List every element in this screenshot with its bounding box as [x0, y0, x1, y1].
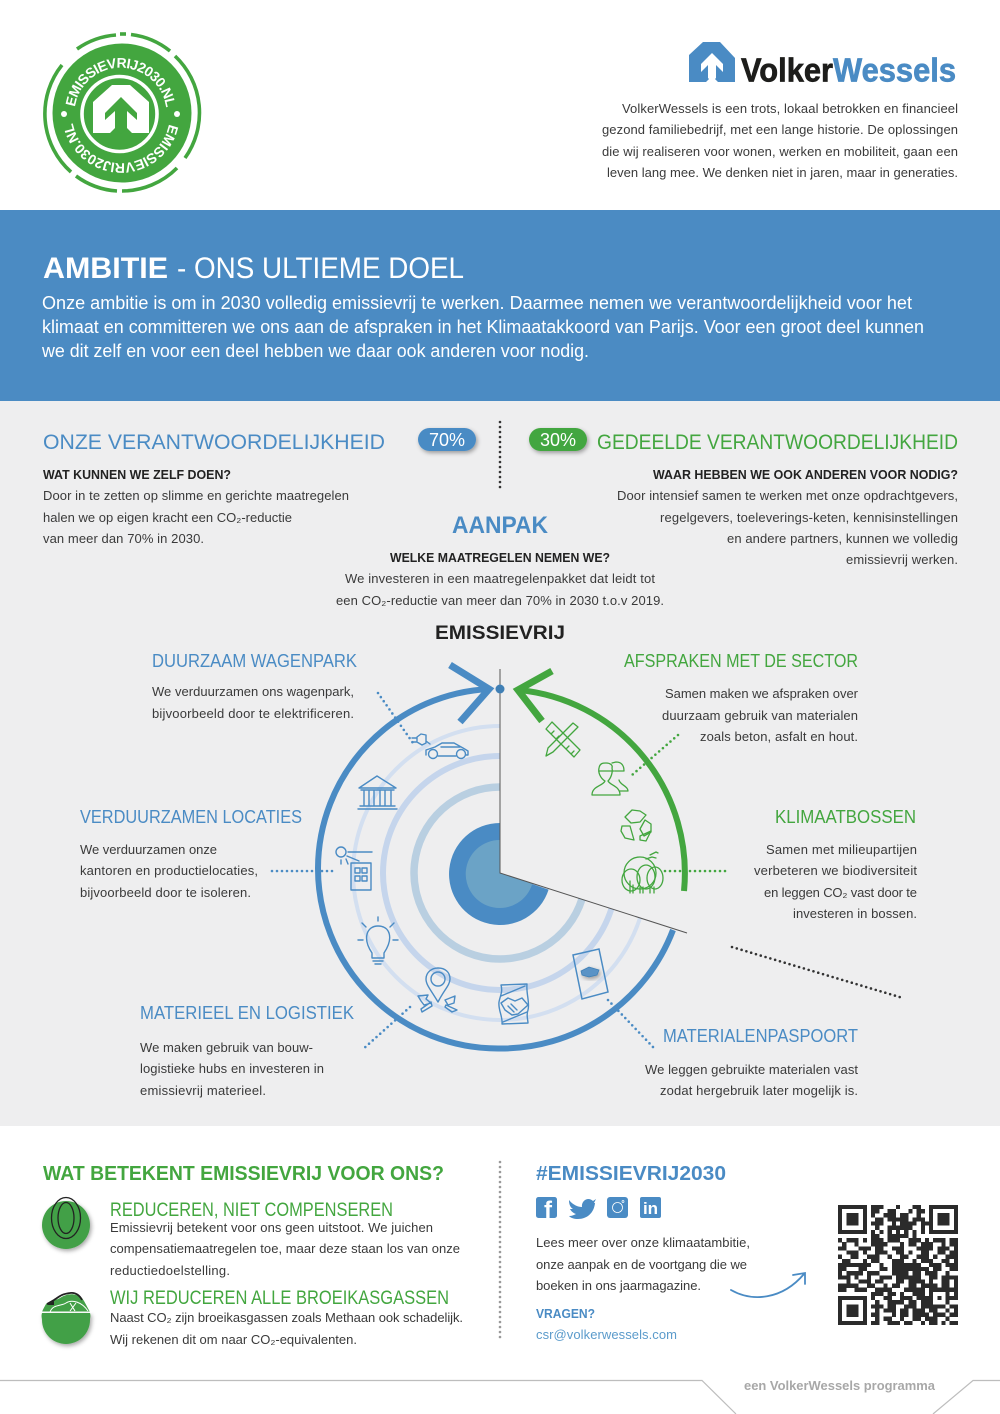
arc: green progress arrow [518, 671, 685, 891]
icon: instagram [607, 1197, 628, 1218]
text block: reduceren niet compenseren: compensatiemaatregelen toe, maar deze staan los van onze [110, 1241, 460, 1256]
text block: wat kunnen we zelf doen: Door in te zetten op slimme en gerichte maatregelen [43, 488, 349, 503]
heading: ambitie: AMBITIE [43, 252, 168, 285]
callout: materieel en logistiek: We maken gebruik van bouw- [140, 1040, 313, 1055]
ring: inner disc [449, 823, 549, 925]
text block: reduceren niet compenseren: REDUCEREN, NIET COMPENSEREN [110, 1200, 393, 1221]
text block: company intro: gezond familiebedrijf, met een lange historie. De oplossingen [602, 122, 958, 137]
chart: concentric reduction diagram [272, 665, 903, 1050]
text block: alle broeikasgassen: Naast CO₂ zijn broeikasgassen zoals Methaan ook schadelijk. [110, 1310, 463, 1325]
ring: inner core [466, 840, 532, 908]
long dotted divider [732, 947, 903, 998]
callout: duurzaam wagenpark: We verduurzamen ons wagenpark, [152, 684, 354, 699]
icon: recycling [621, 810, 651, 841]
ring: fourth [353, 726, 640, 1020]
text block: wat kunnen we zelf doen [43, 467, 349, 546]
badge: 70%: 70% [429, 430, 465, 450]
callout: afspraken met de sector: Samen maken we afspraken over [665, 686, 859, 701]
text block: reduceren niet compenseren [110, 1200, 460, 1278]
text block: alle broeikasgassen: WIJ REDUCEREN ALLE BROEIKASGASSEN [110, 1288, 449, 1309]
callout: afspraken met de sector: AFSPRAKEN MET DE SECTOR [624, 651, 858, 671]
text block: waar hebben we anderen nodig [617, 467, 958, 567]
text block: ambition paragraph [41, 292, 924, 361]
icon: half submerged landscape circle [42, 1293, 92, 1344]
heading: aanpak: AANPAK [452, 512, 549, 539]
icon: linkedin: in [643, 1199, 658, 1218]
text block: lees meer [536, 1235, 750, 1293]
text block: waar hebben we anderen nodig: en andere partners, kunnen we volledig [727, 531, 958, 546]
logo: VolkerWessels [689, 42, 956, 88]
callout: materialenpaspoort: MATERIALENPASPOORT [663, 1026, 858, 1046]
text block: aanpak intro: een CO₂-reductie van meer dan 70% in 2030 t.o.v 2019. [336, 593, 664, 608]
callout: materieel en logistiek: emissievrij materieel. [140, 1083, 266, 1098]
text block: wat kunnen we zelf doen: van meer dan 70% in 2030. [43, 531, 204, 546]
callout: afspraken met de sector: zoals beton, asfalt en hout. [700, 729, 858, 744]
text block: aanpak intro: We investeren in een maatregelenpakket dat leidt tot [345, 571, 655, 586]
footer: programme text: een VolkerWessels programma [744, 1378, 936, 1393]
text block: company intro: die wij realiseren voor wonen, werken en mobiliteit, gaan een [602, 144, 958, 159]
callout: afspraken met de sector: duurzaam gebruik van materialen [662, 708, 858, 723]
text block: aanpak intro [336, 550, 664, 608]
QR code [838, 1207, 958, 1323]
icon: handshake bag [499, 984, 529, 1024]
text block: alle broeikasgassen: Wij rekenen dit om naar CO₂-equivalenten. [110, 1332, 357, 1347]
footer: frame line [0, 1380, 1000, 1414]
icon: sun and building [336, 847, 372, 890]
callout: materieel en logistiek [140, 1003, 354, 1098]
callout: klimaatbossen: Samen met milieupartijen [766, 842, 917, 857]
badge: 30% [529, 428, 587, 451]
text block: alle broeikasgassen [110, 1288, 463, 1347]
callout: materieel en logistiek: logistieke hubs en investeren in [140, 1061, 324, 1076]
text block: waar hebben we anderen nodig: emissievrij werken. [846, 552, 958, 567]
text block: ambition paragraph: we dit zelf en voor een deel hebben we daar ook anderen voor nodig. [41, 340, 589, 361]
callout: klimaatbossen: verbeteren we biodiversiteit [754, 863, 917, 878]
text block: wat kunnen we zelf doen: halen we op eigen kracht een CO₂-reductie [43, 510, 292, 525]
icon: location pin with arrows [418, 968, 457, 1012]
connector: klimaatbossen [665, 870, 730, 872]
axis lines [500, 669, 687, 933]
callout: verduurzamen locaties [80, 807, 302, 900]
callout: materieel en logistiek: MATERIEEL EN LOGISTIEK [140, 1003, 354, 1023]
icon: forest [622, 852, 663, 893]
connector: locaties [272, 870, 337, 872]
heading: hashtag: #EMISSIEVRIJ2030 [536, 1163, 726, 1185]
callout: duurzaam wagenpark: DUURZAAM WAGENPARK [152, 651, 357, 671]
callout: materialenpaspoort [645, 1026, 858, 1098]
logo: VolkerWessels: Volker [741, 52, 833, 88]
icon: ruler and pencil [546, 722, 580, 757]
callout: klimaatbossen [754, 807, 917, 921]
badge: 30%: 30% [540, 430, 576, 450]
callout: duurzaam wagenpark: bijvoorbeeld door te elektrificeren. [152, 706, 354, 721]
marker: target dot [496, 684, 504, 694]
heading: onze verantwoordelijkheid: ONZE VERANTWOORDELIJKHEID [43, 430, 385, 454]
arrow: to qr code [731, 1273, 805, 1297]
connector: materieel [362, 1007, 410, 1050]
icon: zero on green circle [42, 1198, 90, 1249]
heading: wat betekent emissievrij: WAT BETEKENT EMISSIEVRIJ VOOR ONS? [43, 1163, 444, 1185]
icon: electric car [412, 734, 468, 758]
text block: waar hebben we anderen nodig: Door intensief samen te werken met onze opdrachtgevers, [617, 488, 958, 503]
logo: emissievrij2030 badge: EMISSIEVRIJ2030.NL [66, 58, 174, 108]
callout: verduurzamen locaties: We verduurzamen onze [80, 842, 217, 857]
text block: ambition paragraph: Onze ambitie is om in 2030 volledig emissievrij te werken. Daarmee nemen we verantwoordelijkheid voor het [42, 292, 912, 313]
panel: ambition band [0, 210, 1000, 401]
callout: duurzaam wagenpark [152, 651, 357, 721]
heading: gedeelde verantwoordelijkheid: GEDEELDE VERANTWOORDELIJKHEID [597, 430, 958, 454]
callout: klimaatbossen: en leggen CO₂ vast door te [764, 885, 917, 900]
connector: afspraken [632, 735, 678, 775]
text block: lees meer: onze aanpak en de voortgang die we [536, 1257, 747, 1272]
text block: aanpak intro: WELKE MAATREGELEN NEMEN WE? [390, 550, 610, 565]
ring: third [383, 756, 611, 990]
panel: grey approach background [0, 401, 1000, 1126]
text block: lees meer: boeken in ons jaarmagazine. [536, 1278, 701, 1293]
connector: wagenpark [378, 693, 413, 743]
logo: emissievrij2030 badge [43, 32, 202, 193]
heading: ambitie: - ONS ULTIEME DOEL [177, 252, 464, 285]
connector: paspoort [608, 1000, 653, 1047]
arc: blue progress arrow [318, 665, 673, 1049]
icon: linkedin [640, 1197, 661, 1218]
callout: klimaatbossen: investeren in bossen. [793, 906, 917, 921]
ring: second [414, 787, 582, 959]
heading: emissievrij: EMISSIEVRIJ [435, 623, 565, 644]
logo: VolkerWessels: Wessels [833, 52, 956, 88]
icon: bank building [358, 776, 397, 809]
text block: reduceren niet compenseren: reductiedoelstelling. [110, 1263, 230, 1278]
text block: company intro [602, 101, 958, 180]
callout: materialenpaspoort: zodat hergebruik later mogelijk is. [660, 1083, 858, 1098]
icon: material passport [573, 949, 608, 999]
text block: waar hebben we anderen nodig: WAAR HEBBEN WE OOK ANDEREN VOOR NODIG? [653, 467, 958, 482]
text block: company intro: leven lang mee. We denken niet in jaren, maar in generaties. [607, 165, 958, 180]
callout: verduurzamen locaties: bijvoorbeeld door te isoleren. [80, 885, 251, 900]
text block: vragen: csr@volkerwessels.com [536, 1327, 677, 1342]
text block: vragen [536, 1306, 677, 1342]
icon: facebook [536, 1197, 557, 1224]
icon: twitter [569, 1199, 596, 1219]
text block: wat kunnen we zelf doen: WAT KUNNEN WE ZELF DOEN? [43, 467, 231, 482]
callout: materialenpaspoort: We leggen gebruikte materialen vast [645, 1062, 858, 1077]
text block: waar hebben we anderen nodig: regelgevers, toeleverings-keten, kennisinstellingen [660, 510, 958, 525]
callout: klimaatbossen: KLIMAATBOSSEN [775, 807, 916, 827]
text block: ambition paragraph: klimaat en committeren we ons aan de afspraken in het Klimaatakkoord van Parijs. Voor een groot deel kunnen [42, 316, 924, 337]
text block: company intro: VolkerWessels is een trots, lokaal betrokken en financieel [622, 101, 958, 116]
callout: afspraken met de sector [624, 651, 859, 744]
icon: light bulb [358, 917, 398, 964]
text block: reduceren niet compenseren: Emissievrij betekent voor ons geen uitstoot. We juichen [110, 1220, 433, 1235]
icon: workers [592, 762, 628, 795]
text block: lees meer: Lees meer over onze klimaatambitie, [536, 1235, 750, 1250]
callout: verduurzamen locaties: kantoren en productielocaties, [80, 863, 258, 878]
callout: verduurzamen locaties: VERDUURZAMEN LOCATIES [80, 807, 302, 827]
text block: vragen: VRAGEN? [536, 1306, 595, 1321]
icon: facebook: f [544, 1197, 553, 1224]
badge: 70% [418, 428, 476, 451]
logo: emissievrij2030 badge: EMISSIEVRIJ2030.NL [64, 123, 178, 173]
